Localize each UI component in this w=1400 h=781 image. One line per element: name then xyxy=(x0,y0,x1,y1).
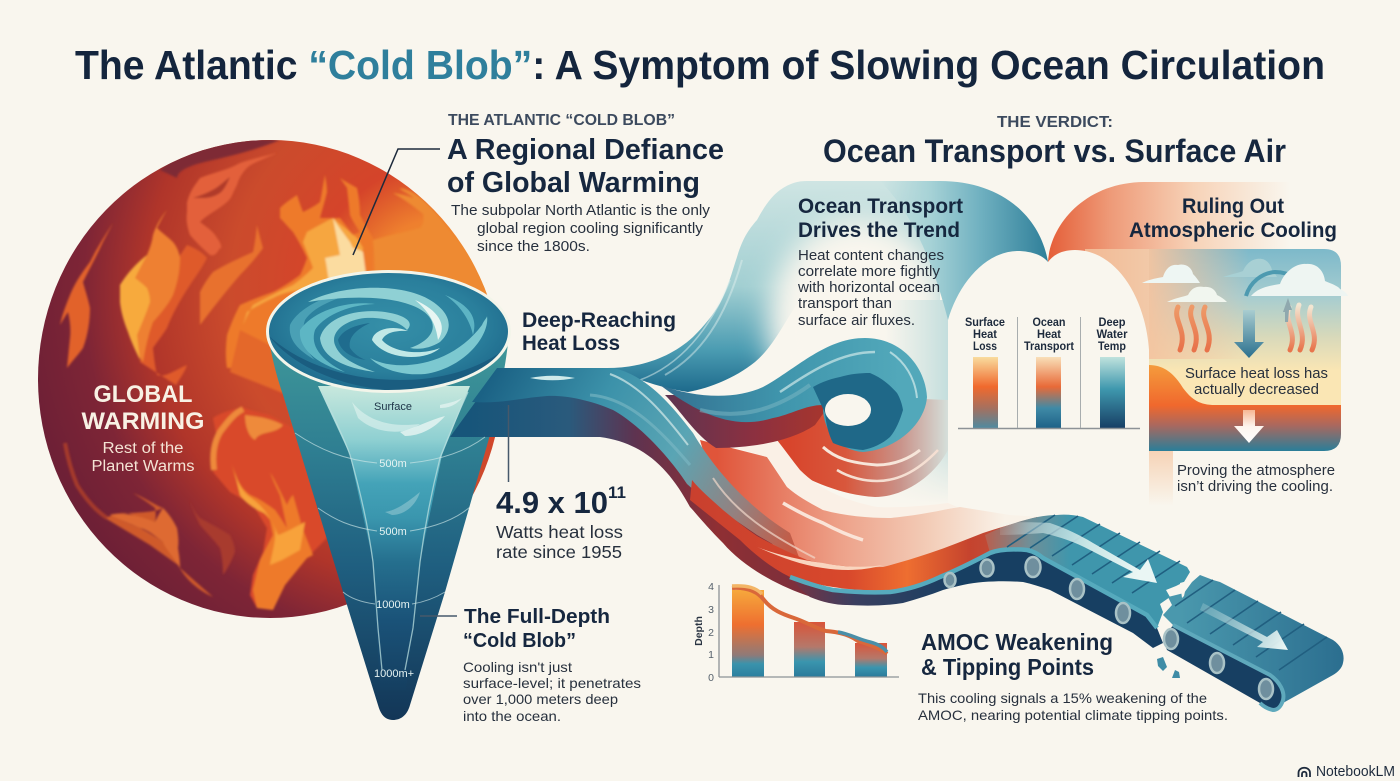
text: ocean transport: Ocean Transport xyxy=(798,194,963,218)
heading: regional defiance: A Regional Defiance xyxy=(447,134,724,166)
text: AMOC weakening xyxy=(918,629,1228,723)
leader line: regional xyxy=(353,149,440,255)
depth labels: 1000m xyxy=(376,599,410,611)
funnel: inner cone and swirl xyxy=(268,272,510,690)
heading: the verdict xyxy=(823,114,1286,169)
bar: deep water temp xyxy=(1100,357,1125,428)
bar labels: Heat xyxy=(973,329,997,341)
heading: the verdict: THE VERDICT: xyxy=(997,114,1113,131)
cream stripe xyxy=(737,440,957,518)
belt surface left xyxy=(985,515,1190,628)
text: proving the atmosphere: isn’t driving the cooling. xyxy=(1177,479,1333,495)
icon: logo arcs xyxy=(1298,768,1310,777)
planet label: Rest of the xyxy=(102,440,184,457)
rollers xyxy=(944,557,1273,699)
heading: regional defiance: of Global Warming xyxy=(447,167,700,199)
ring around swirl xyxy=(770,395,948,497)
text: full-depth cold blob: over 1,000 meters deep xyxy=(463,691,618,707)
stat: heat loss rate: 11 xyxy=(608,483,626,502)
text: regional body: global region cooling significantly xyxy=(477,221,704,237)
heading: regional defiance xyxy=(447,112,724,255)
text: regional body: The subpolar North Atlantic is the only xyxy=(451,203,711,219)
axis numbers xyxy=(708,581,714,684)
text: ruling out: Ruling Out xyxy=(1182,194,1284,218)
axis numbers: 3 xyxy=(708,604,714,616)
text: proving the atmosphere: Proving the atmosphere xyxy=(1177,463,1335,479)
bar: ocean heat transport xyxy=(1036,357,1061,428)
lower red band xyxy=(690,480,1040,590)
main heat-loss stream xyxy=(450,368,1040,605)
belt slats left xyxy=(1007,515,1180,593)
dark underside xyxy=(450,368,847,605)
text: ocean transport xyxy=(797,194,963,329)
bar labels: Loss xyxy=(973,341,997,353)
text: deep-reaching heat loss: Heat Loss xyxy=(522,332,620,355)
funnel body xyxy=(268,332,509,720)
arrow: downward dark xyxy=(1234,310,1264,358)
text: AMOC weakening: AMOC Weakening xyxy=(921,629,1113,655)
panel: orange atmospheric ribbon xyxy=(1048,182,1290,300)
text: surface heat loss decreased: actually decreased xyxy=(1194,382,1319,398)
funnel top swirl xyxy=(268,272,510,392)
text: regional body: since the 1800s. xyxy=(477,239,590,255)
bar chart: three variables xyxy=(958,317,1140,428)
icon: clouds xyxy=(1142,259,1348,302)
bar labels: Water xyxy=(1096,329,1128,341)
text: deep-reaching heat loss xyxy=(522,309,676,355)
text: ocean transport: Drives the Trend xyxy=(798,218,960,242)
heading: the verdict: Ocean Transport vs. Surface Air xyxy=(823,133,1286,169)
stat: heat loss rate: Watts heat loss xyxy=(496,522,623,542)
depth labels: 500m xyxy=(379,458,407,470)
bar labels: Temp xyxy=(1098,341,1126,353)
bar labels: Ocean xyxy=(1032,317,1066,329)
text: full-depth cold blob: surface-level; it penetrates xyxy=(463,675,641,691)
text: deep-reaching heat loss: Deep-Reaching xyxy=(522,309,676,332)
crack gap xyxy=(1180,580,1191,598)
trend ribbon xyxy=(732,588,887,654)
belt surface right xyxy=(1163,575,1344,703)
leader line: full depth xyxy=(420,615,457,617)
planet label: WARMING xyxy=(82,408,204,435)
text: proving the atmosphere xyxy=(1177,463,1335,495)
bar labels xyxy=(965,317,1128,353)
panel: pale ocean transport ribbon xyxy=(607,181,1048,506)
panel: atmosphere scene xyxy=(1085,249,1348,454)
belt slats right xyxy=(1175,580,1327,670)
axis numbers: 2 xyxy=(708,627,714,639)
text: ocean transport: transport than xyxy=(798,296,892,312)
teal top surface xyxy=(472,368,800,560)
conveyor belt: AMOC xyxy=(790,515,1344,710)
stat: heat loss rate: 4.9 x 10 xyxy=(496,485,608,520)
stat: heat loss rate xyxy=(496,483,626,562)
lower peach fan xyxy=(700,440,1040,600)
text: full-depth cold blob: Cooling isn't just xyxy=(463,659,572,675)
chart: depth bars xyxy=(693,581,899,684)
bar labels: Surface xyxy=(965,317,1005,329)
axis label: Depth xyxy=(693,616,705,646)
axis numbers: 0 xyxy=(708,672,714,684)
swirl wave xyxy=(660,338,927,452)
text: surface heat loss decreased xyxy=(1185,366,1328,398)
depth labels: 1000m+ xyxy=(374,668,414,680)
bar labels: Deep xyxy=(1098,317,1126,329)
axis numbers: 1 xyxy=(708,649,714,661)
planet label: GLOBAL xyxy=(94,381,192,408)
depth labels: Surface xyxy=(374,401,412,413)
axis numbers: 4 xyxy=(708,581,714,593)
swirl hole xyxy=(825,394,871,426)
text: ocean transport: Heat content changes xyxy=(798,248,944,264)
funnel inner cone xyxy=(318,386,470,690)
red fan under the swirl xyxy=(700,395,1040,600)
leader line: heat loss xyxy=(508,405,510,482)
bars xyxy=(732,590,887,677)
text: full-depth cold blob: into the ocean. xyxy=(463,708,561,724)
heading: regional defiance: THE ATLANTIC “COLD BLOB” xyxy=(448,112,675,129)
planet label: Planet Warms xyxy=(92,458,195,475)
arrow: belt flow before break xyxy=(1000,522,1157,583)
text: AMOC weakening: & Tipping Points xyxy=(921,654,1094,680)
text: AMOC weakening: AMOC, nearing potential climate tipping points. xyxy=(918,707,1228,723)
water streaks xyxy=(352,398,462,515)
text: full-depth cold blob: The Full-Depth xyxy=(464,606,610,628)
bar: surface heat loss xyxy=(973,357,998,428)
depth labels: 500m xyxy=(379,526,407,538)
text: ruling out: Atmospheric Cooling xyxy=(1129,218,1337,242)
text: ocean transport: surface air fluxes. xyxy=(798,313,915,329)
depth rings xyxy=(295,433,485,604)
logo: NotebookLM: NotebookLM xyxy=(1316,763,1395,780)
icon: heat waves xyxy=(1177,305,1314,350)
bar labels: Transport xyxy=(1024,341,1074,353)
belt side right xyxy=(1163,625,1283,710)
text: ocean transport: with horizontal ocean xyxy=(797,280,940,296)
funnel rim xyxy=(268,272,510,392)
stat: heat loss rate: rate since 1955 xyxy=(496,542,622,562)
ocean and land band xyxy=(1149,365,1341,451)
arrow: belt flow after break xyxy=(1200,603,1288,650)
text: ocean transport: correlate more fightly xyxy=(798,264,941,280)
icon: small grey wisp arrow xyxy=(1283,298,1292,322)
arch window xyxy=(948,250,1149,530)
planet: global warming xyxy=(38,135,505,618)
text: AMOC weakening: This cooling signals a 15% weakening of the xyxy=(918,690,1207,706)
text: ruling out xyxy=(1129,194,1337,242)
text: regional body xyxy=(451,203,711,255)
bar labels: Heat xyxy=(1037,329,1061,341)
arrow: downward white xyxy=(1234,410,1264,443)
depth labels xyxy=(374,401,414,680)
text: surface heat loss decreased: Surface heat loss has xyxy=(1185,366,1328,382)
text: full-depth cold blob xyxy=(463,606,641,724)
title: The Atlantic “Cold Blob”: A Symptom of Slowing Ocean Circulation xyxy=(75,42,1325,88)
belt side left xyxy=(790,549,1163,648)
text: full-depth cold blob: “Cold Blob” xyxy=(463,630,576,652)
debris xyxy=(1157,657,1180,678)
planet label xyxy=(82,381,204,475)
maroon under swirl xyxy=(665,390,840,448)
